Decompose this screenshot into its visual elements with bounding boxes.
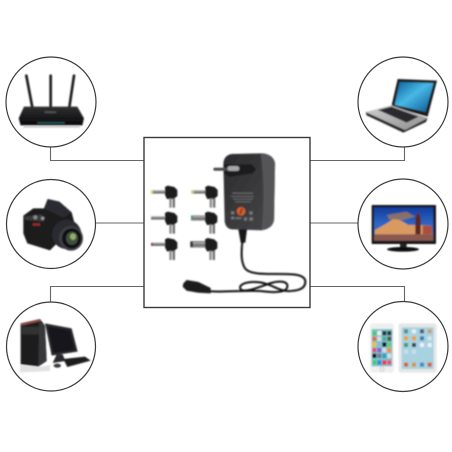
circle: camera <box>6 180 96 268</box>
connector line: laptop <box>310 146 404 160</box>
label block <box>231 193 254 221</box>
monitor screen <box>374 207 433 241</box>
camera image <box>23 199 83 251</box>
phone home button <box>380 367 384 371</box>
adapter body <box>223 153 275 230</box>
plug base <box>224 164 256 177</box>
tablet <box>399 323 437 373</box>
connector line: phone and tablet <box>310 286 404 302</box>
panel: adapter box <box>144 138 310 308</box>
camera body <box>23 199 75 250</box>
tip: grey <box>151 212 177 234</box>
tower <box>21 319 47 367</box>
reflection <box>20 365 50 372</box>
connector line: camera <box>96 222 144 224</box>
tip: yellow 2 <box>191 186 218 208</box>
cable <box>210 242 305 292</box>
connector line: desktop <box>50 286 144 302</box>
monitor image <box>372 205 436 252</box>
router body <box>19 107 84 125</box>
tip: green <box>191 212 217 234</box>
connector line: monitor <box>310 222 358 224</box>
circle: desktop computer <box>6 302 96 391</box>
phone and tablet image <box>370 323 437 373</box>
strain relief <box>238 229 247 243</box>
laptop lid <box>391 79 437 117</box>
circle: phone and tablet <box>358 302 448 392</box>
tip: yellow 1 <box>151 186 177 208</box>
phone <box>370 323 394 373</box>
adapter photo <box>183 153 305 293</box>
water <box>374 234 433 241</box>
plug barrel <box>227 166 239 171</box>
monitor frame <box>372 205 436 244</box>
barrel socket <box>183 280 211 293</box>
city skyline <box>375 219 433 236</box>
antennas <box>26 76 74 107</box>
monitor stand <box>400 244 407 248</box>
laptop image <box>366 79 437 133</box>
tablet screen <box>402 327 434 369</box>
laptop base <box>366 105 428 130</box>
keyboard <box>378 107 419 123</box>
adapter side <box>261 154 275 230</box>
phone screen <box>372 329 392 366</box>
phone icons <box>372 331 391 365</box>
mouse <box>54 364 61 368</box>
tip: red <box>151 238 177 260</box>
keyboard <box>63 357 91 367</box>
tablet icons <box>404 329 432 367</box>
tip: wide barrel <box>190 238 217 260</box>
monitor stand <box>53 354 65 363</box>
router image <box>19 76 84 128</box>
lens <box>52 220 81 249</box>
laptop screen <box>395 82 434 112</box>
plug pin <box>213 168 230 171</box>
circle: router <box>6 57 96 147</box>
desktop image <box>20 319 91 372</box>
circle: laptop <box>358 57 448 147</box>
circle: monitor <box>358 179 448 269</box>
connector line: router <box>50 147 144 160</box>
voltage dial <box>237 207 245 216</box>
clouds <box>387 212 415 220</box>
monitor <box>45 323 78 356</box>
